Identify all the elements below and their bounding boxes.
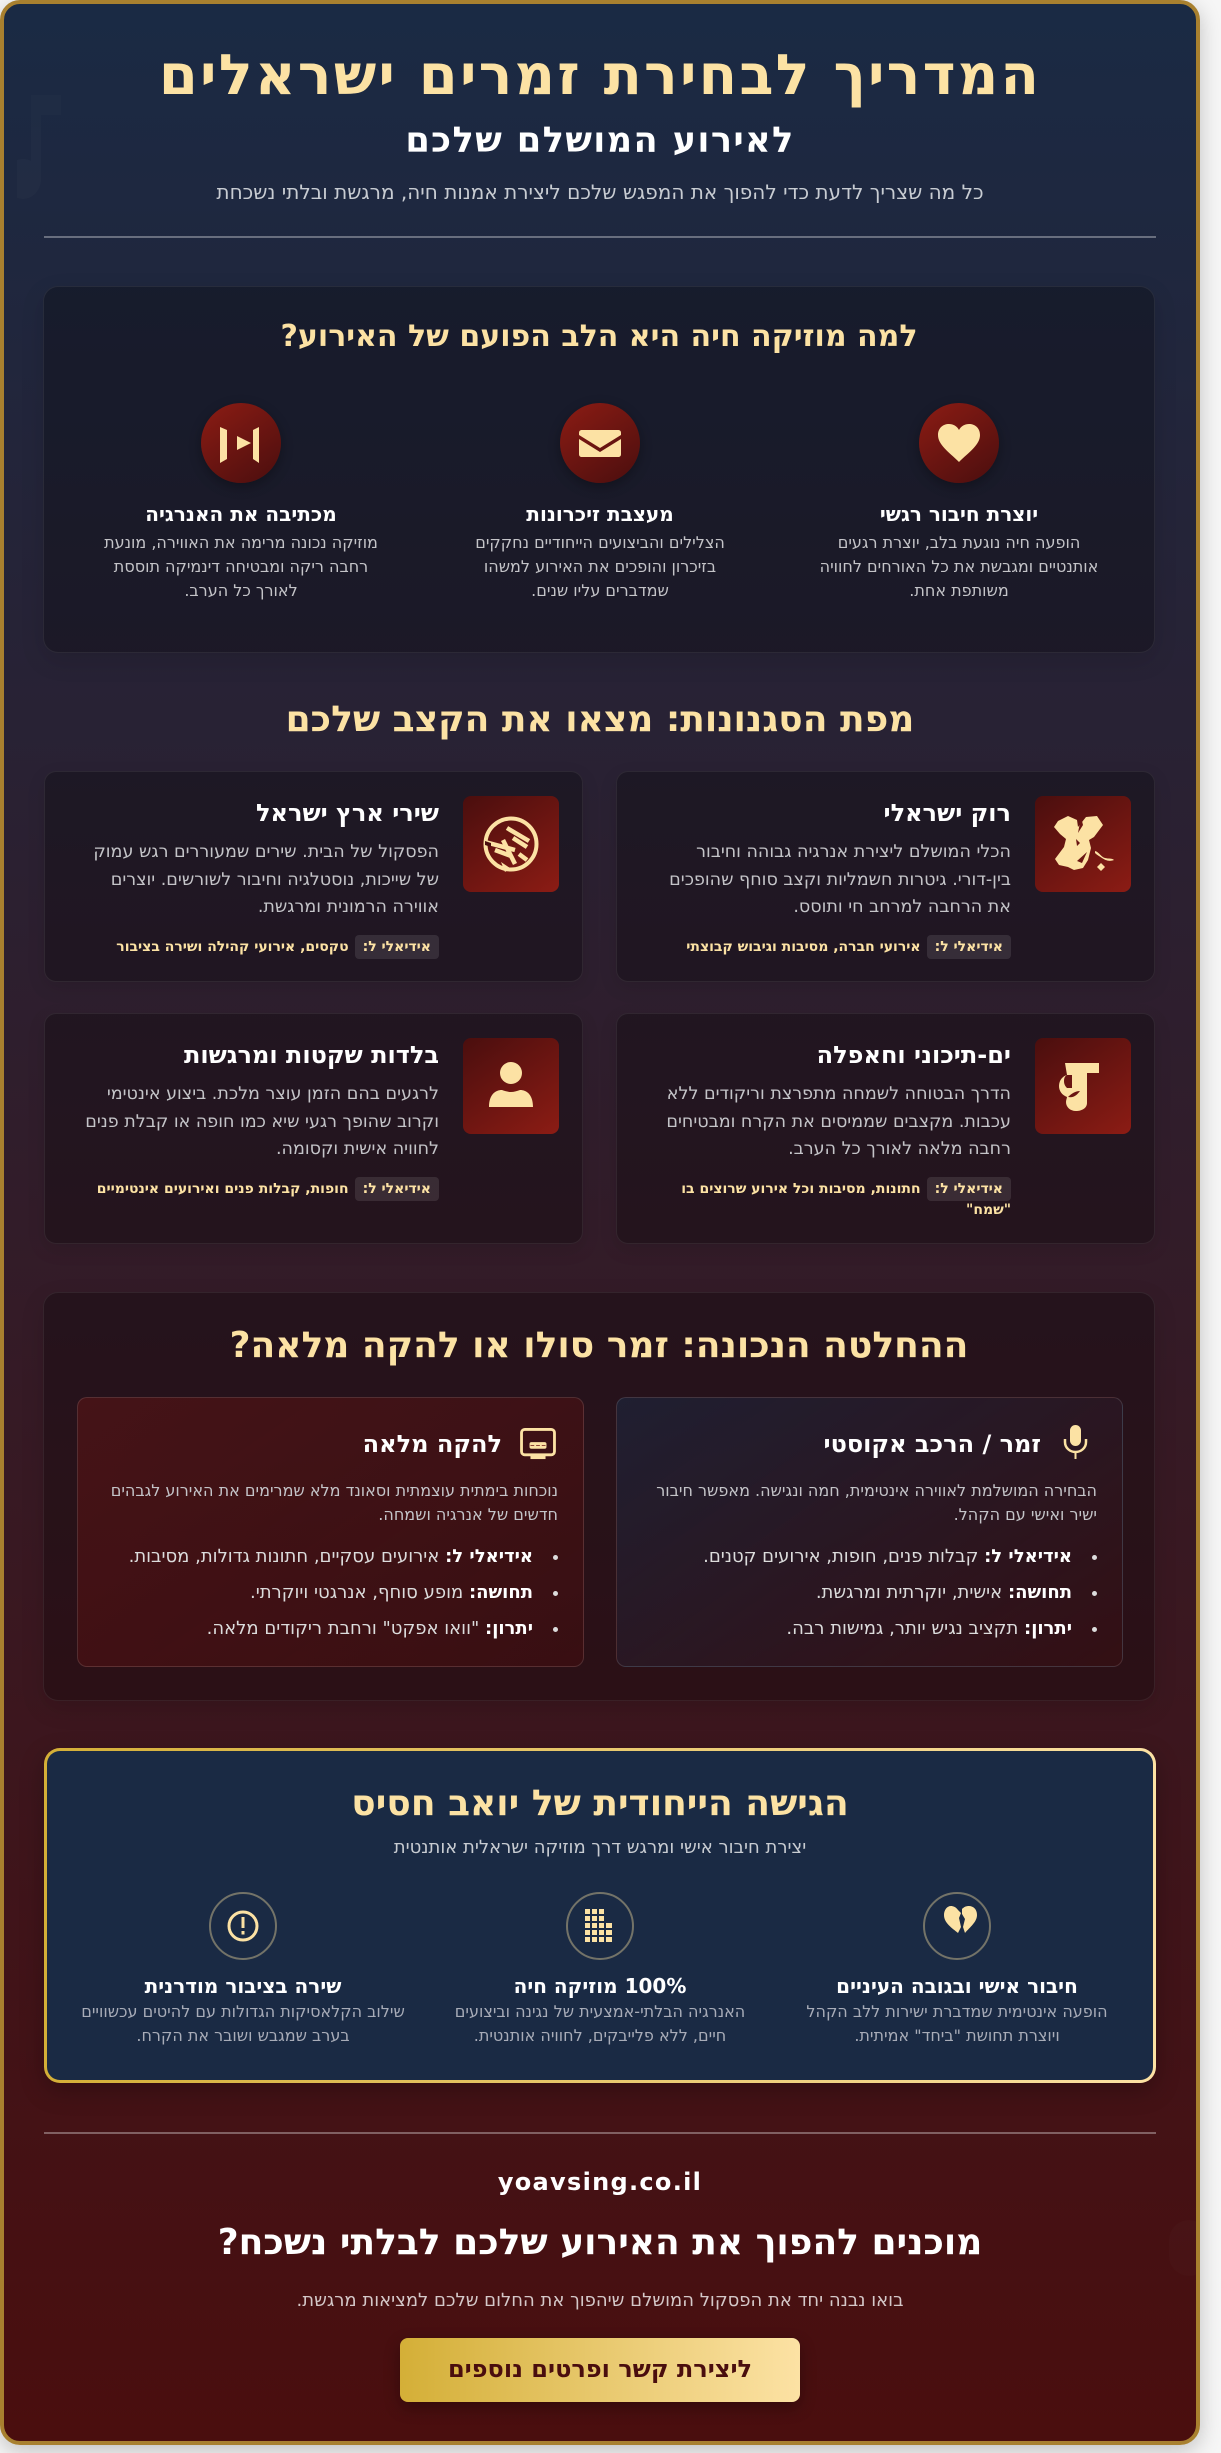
card title: רוק ישראלי: [884, 799, 1011, 827]
feature: 100% live music: האנרגיה הבלתי-אמצעית של נגינה וביצועים: [455, 2002, 745, 2021]
feature: emotional connection: הופעה חיה נוגעת בלב, יוצרת רגעים: [838, 533, 1080, 552]
bullet: feeling: תחושה: אישית, יוקרתית ומרגשת.: [816, 1582, 1072, 1603]
heading: style map: מפת הסגנונות: מצאו את הקצב שלכם: [286, 699, 914, 740]
feature: emotional connection: יוצרת חיבור רגשי: [880, 502, 1038, 526]
card description: וקרוב שהופך רגעי שיא כמו חופה או קבלת פנים: [85, 1112, 439, 1132]
call-to-action heading: מוכנים להפוך את האירוע שלכם לבלתי נשכח?: [218, 2222, 982, 2263]
option: singer acoustic: [616, 1397, 1123, 1667]
feature: personal connection: [806, 1974, 1108, 2045]
panel: Yoav Hasis's unique approach: [44, 1748, 1156, 2083]
card description: הדרך הבטוחה לשמחה מתפרצת וריקודים ללא: [667, 1084, 1011, 1104]
card description: בין-דורי. גיטרות חשמליות וקצב סוחף שהופכים: [669, 870, 1011, 890]
feature: shaping memories: [475, 502, 725, 600]
bullet: advantage: יתרון: "וואו אפקט" ורחבת ריקודים מלאה.: [207, 1618, 533, 1639]
card: songs of the land of Israel: [44, 771, 583, 982]
ideal-for tag: חופות, קבלות פנים ואירועים אינטימיים: [97, 1181, 349, 1197]
card title: שירי ארץ ישראל: [256, 799, 439, 827]
feature: dictating the energy: לאורך כל הערב.: [184, 581, 298, 600]
card description: לחוויה אישית וקסומה.: [276, 1139, 439, 1159]
ideal-for tag: [116, 935, 439, 959]
feature: dictating the energy: מכתיבה את האנרגיה: [145, 502, 337, 526]
feature: emotional connection: [820, 502, 1098, 600]
feature: 100% live music: 100% מוזיקה חיה: [514, 1974, 686, 1998]
card description: [669, 842, 1011, 917]
icon: screen: [520, 1428, 556, 1460]
option title: זמר / הרכב אקוסטי: [824, 1430, 1041, 1458]
card description: הכלי המושלם ליצירת אנרגיה גבוהה וחיבור: [696, 842, 1011, 862]
card description: של שייכות, נוסטלגיה וחיבור לשורשים. יוצרים: [111, 870, 439, 890]
icon: exclamation ring: [209, 1892, 277, 1960]
icon: heart ring: [923, 1892, 991, 1960]
ideal-for tag: אירועי חברה, מסיבות וגיבוש קבוצתי: [686, 939, 921, 955]
decorative watermark: music note left: [17, 95, 61, 199]
feature: modern sing-along: שילוב הקלאסיקות הגדולות עם להיטים עכשוויים: [81, 2002, 405, 2021]
card description: אווירה הרמונית ומרגשת.: [258, 897, 439, 917]
card: Mediterranean and hafla: [616, 1013, 1155, 1244]
contact button: ליצירת קשר ופרטים נוספים: [448, 2355, 752, 2383]
option description: חדשים של אנרגיה ושמחה.: [378, 1505, 558, 1524]
contact button: [400, 2338, 800, 2402]
card: Israeli rock: [616, 771, 1155, 982]
feature: emotional connection: אותנטיים ומגבשת את כל האורחים לחוויה: [820, 557, 1098, 576]
ideal-for tag: טקסים, אירועי קהילה ושירה בציבור: [116, 939, 349, 955]
feature: shaping memories: הצלילים והביצועים הייחודיים נחקקים: [475, 533, 725, 552]
card description: רחבה מלאה לאורך כל הערב.: [788, 1139, 1011, 1159]
feature: modern sing-along: [81, 1974, 405, 2045]
option title: להקה מלאה: [363, 1430, 502, 1458]
ideal-for tag: אידיאלי ל:: [935, 939, 1003, 955]
feature: emotional connection: משותפת אחת.: [909, 581, 1009, 600]
icon: heart circle: [919, 403, 999, 483]
decorative watermark: music note right: [1169, 2220, 1209, 2276]
feature: dictating the energy: רחבה ריקה ומבטיחה דינמיקה תוססת: [114, 557, 368, 576]
icon: envelope circle: [560, 403, 640, 483]
ideal-for tag: "שמח": [966, 1202, 1011, 1218]
feature: shaping memories: שמדברים עליו שנים.: [531, 581, 669, 600]
icon: music note: [1035, 1038, 1131, 1134]
feature: dictating the energy: [104, 502, 378, 600]
icon: guitar: [1035, 796, 1131, 892]
card description: הפסקול של הבית. שירים שמעוררים רגש עמוק: [93, 842, 439, 862]
subtitle: לאירוע המושלם שלכם: [405, 120, 795, 161]
ideal-for tag: אידיאלי ל:: [935, 1181, 1003, 1197]
feature: shaping memories: בזיכרון והופכים את האירוע למשהו: [484, 557, 716, 576]
feature: 100% live music: [455, 1974, 745, 2045]
feature: dictating the energy: מוזיקה נכונה מרימה את האווירה, מונעת: [104, 533, 378, 552]
feature: personal connection: חיבור אישי ובגובה העיניים: [836, 1974, 1078, 1998]
subheading: יצירת חיבור אישי ומרגש דרך מוזיקה ישראלית אותנטית: [394, 1837, 806, 1858]
ideal-for tag: חתונות, מסיבות וכל אירוע שרוצים בו: [681, 1181, 921, 1197]
feature: personal connection: ויוצרת תחושת "ביחד" אמיתית.: [854, 2026, 1060, 2045]
icon: sliders circle: [201, 403, 281, 483]
title: המדריך לבחירת זמרים ישראלים: [159, 43, 1041, 108]
card description: את הרחבה למרחב חי ותוסס.: [793, 897, 1011, 917]
option description: [111, 1481, 558, 1524]
card description: עכבות. מקצבים שממיסים את הקרח ומבטיחים: [666, 1112, 1011, 1132]
intro text: כל מה שצריך לדעת כדי להפוך את המפגש שלכם ליצירת אמנות חיה, מרגשת ובלתי נשכחת: [216, 180, 984, 204]
feature: personal connection: הופעה אינטימית שמדברת ישירות ללב הקהל: [806, 2002, 1108, 2021]
feature: 100% live music: חיים, ללא פלייבקים, לחוויה אותנטית.: [474, 2026, 726, 2045]
option: full band: [77, 1397, 584, 1667]
card description: [85, 1084, 439, 1159]
card description: [93, 842, 439, 917]
feature: modern sing-along: בערב שמגבש ושובר את הקרח.: [136, 2026, 350, 2045]
ideal-for tag: [686, 935, 1011, 959]
option description: [656, 1481, 1097, 1524]
bullet: ideal for: אידיאלי ל: קבלות פנים, חופות, אירועים קטנים.: [703, 1546, 1072, 1567]
ideal-for tag: [681, 1177, 1011, 1218]
icon: circled symbol: [463, 796, 559, 892]
website name: yoavsing.co.il: [498, 2168, 702, 2196]
option description: נוכחות בימתית עוצמתית וסאונד מלא שמרימים את האירוע לגבהים: [111, 1481, 558, 1500]
icon: grid ring: [566, 1892, 634, 1960]
option description: ישיר ואישי עם הקהל.: [954, 1505, 1097, 1524]
panel: solo or full band: [43, 1292, 1155, 1701]
bullet: ideal for: אידיאלי ל: אירועים עסקיים, חתונות גדולות, מסיבות.: [129, 1546, 533, 1567]
card description: [666, 1084, 1011, 1159]
icon: person: [463, 1038, 559, 1134]
icon: microphone: [1064, 1425, 1088, 1459]
heading: why live music: למה מוזיקה חיה היא הלב הפועם של האירוע?: [281, 319, 917, 354]
ideal-for tag: אידיאלי ל:: [363, 1181, 431, 1197]
bullet: advantage: יתרון: תקציב נגיש יותר, גמישות רבה.: [786, 1618, 1072, 1639]
ideal-for tag: אידיאלי ל:: [363, 939, 431, 955]
card description: לרגעים בהם הזמן עוצר מלכת. ביצוע אינטימי: [107, 1084, 439, 1104]
option description: הבחירה המושלמת לאווירה אינטימית, חמה ונגישה. מאפשר חיבור: [656, 1481, 1097, 1500]
heading: solo or band: ההחלטה הנכונה: זמר סולו או להקה מלאה?: [230, 1325, 968, 1366]
card title: ים-תיכוני וחאפלה: [817, 1041, 1011, 1069]
card: quiet ballads: [44, 1013, 583, 1244]
ideal-for tag: [97, 1177, 439, 1201]
feature: shaping memories: מעצבת זיכרונות: [526, 502, 674, 526]
feature: modern sing-along: שירה בציבור מודרנית: [145, 1974, 341, 1998]
call-to-action text: בואו נבנה יחד את הפסקול המושלם שיהפוך את החלום שלכם למציאות מרגשת.: [297, 2290, 903, 2311]
bullet: feeling: תחושה: מופע סוחף, אנרגטי ויוקרתי.: [250, 1582, 533, 1603]
panel: why live music: [43, 286, 1155, 653]
card title: בלדות שקטות ומרגשות: [184, 1041, 439, 1069]
heading: unique approach: הגישה הייחודית של יואב חסיס: [351, 1783, 849, 1824]
